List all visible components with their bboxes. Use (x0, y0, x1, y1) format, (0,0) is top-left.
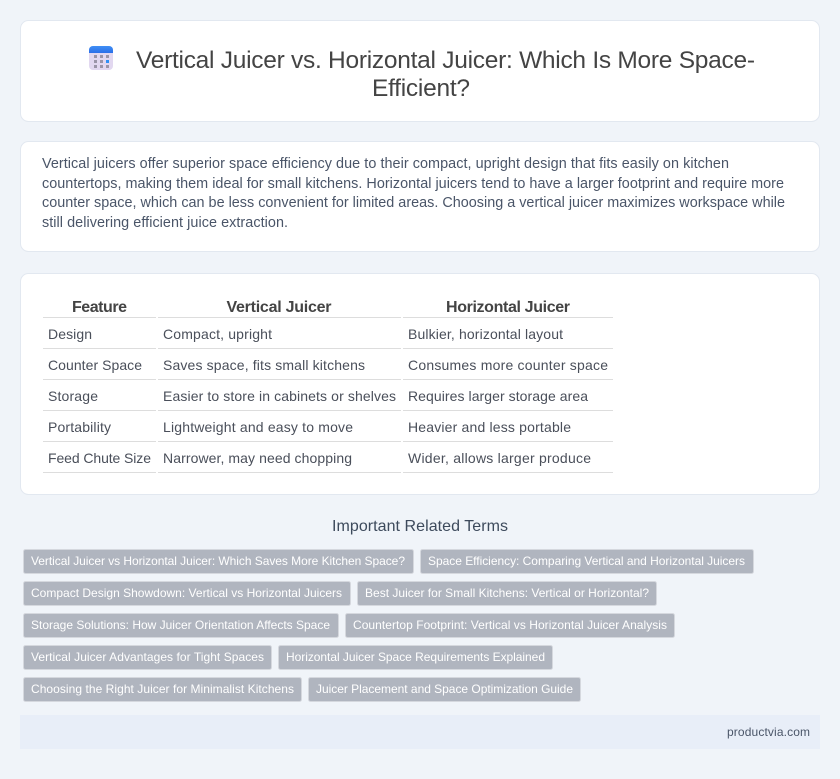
panel: summary (20, 142, 820, 252)
tag (24, 646, 272, 670)
row: feed chute size (48, 450, 591, 466)
row: portability: Lightweight and easy to move (163, 419, 353, 435)
tag: Space Efficiency: Comparing Vertical and Horizontal Juicers (428, 554, 745, 568)
tag (346, 614, 674, 638)
table header: Feature (72, 299, 127, 316)
footer (20, 715, 820, 749)
row: design: Bulkier, horizontal layout (408, 326, 563, 342)
table header: Horizontal Juicer (446, 299, 570, 316)
tag (24, 614, 338, 638)
tag (24, 550, 414, 574)
heading: important related terms: Important Related Terms (332, 518, 508, 535)
row: portability (48, 419, 571, 435)
row: counter space: Consumes more counter space (408, 357, 608, 373)
tag: Compact Design Showdown: Vertical vs Horizontal Juicers (31, 586, 342, 600)
panel: comparison table (20, 274, 820, 494)
row: storage (48, 388, 588, 404)
row: counter space: Saves space, fits small kitchens (163, 357, 365, 373)
row: storage: Storage (48, 388, 98, 404)
tag (24, 678, 302, 702)
tag (420, 550, 754, 574)
tag: Vertical Juicer Advantages for Tight Spaces (31, 650, 264, 664)
summary text: Vertical juicers offer superior space efficiency due to their compact, upright design that fits easily on kitchen (42, 156, 729, 172)
summary text: still delivering efficient juice extraction. (42, 215, 288, 231)
tag: Horizontal Juicer Space Requirements Explained (286, 650, 545, 664)
table header: Vertical Juicer (226, 299, 332, 316)
summary text: countertops, making them ideal for small kitchens. Horizontal juicers tend to have a larger footprint and require more (42, 176, 784, 192)
table header (72, 299, 570, 316)
title: Vertical Juicer vs. Horizontal Juicer: Which Is More Space- (136, 47, 755, 74)
tag: Storage Solutions: How Juicer Orientation Affects Space (31, 618, 330, 632)
tag: Choosing the Right Juicer for Minimalist Kitchens (31, 682, 294, 696)
tag (308, 678, 580, 702)
tag: Vertical Juicer vs Horizontal Juicer: Which Saves More Kitchen Space? (31, 554, 405, 568)
row: feed chute size: Wider, allows larger produce (408, 450, 591, 466)
title: Efficient? (372, 75, 470, 102)
title (136, 47, 755, 102)
summary text (42, 156, 785, 231)
footer source text: productvia.com (727, 725, 810, 739)
row: storage: Easier to store in cabinets or shelves (163, 388, 396, 404)
row: design: Design (48, 326, 92, 342)
row: design (48, 326, 563, 342)
related terms tags (24, 550, 754, 702)
row: counter space (48, 357, 608, 373)
row: portability: Heavier and less portable (408, 419, 571, 435)
tag (278, 646, 552, 670)
tag: Best Juicer for Small Kitchens: Vertical or Horizontal? (365, 586, 649, 600)
row: design: Compact, upright (163, 326, 272, 342)
tag: Countertop Footprint: Vertical vs Horizontal Juicer Analysis (353, 618, 667, 632)
row: feed chute size: Narrower, may need chopping (163, 450, 352, 466)
summary text: counter space, which can be less convenient for limited areas. Choosing a vertical juicer maximizes workspace while (42, 195, 785, 211)
panel: header (20, 20, 820, 122)
tag (24, 582, 350, 606)
icon: calendar grid (89, 46, 113, 70)
row: storage: Requires larger storage area (408, 388, 588, 404)
tag: Juicer Placement and Space Optimization Guide (316, 682, 573, 696)
row: feed chute size: Feed Chute Size (48, 450, 151, 466)
row: portability: Portability (48, 419, 111, 435)
tag (358, 582, 656, 606)
row: counter space: Counter Space (48, 357, 142, 373)
